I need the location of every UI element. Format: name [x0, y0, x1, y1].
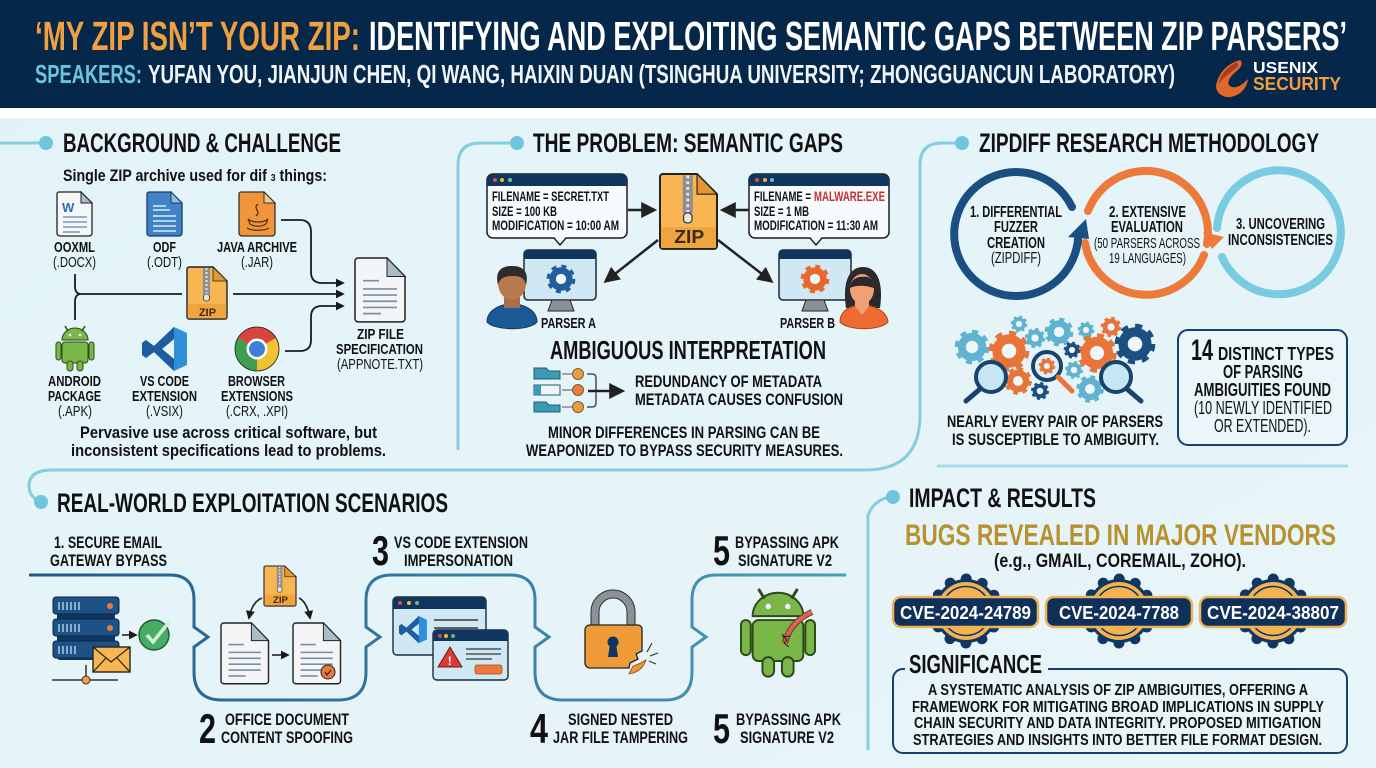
text: scenario 5 top: 5 [713, 527, 730, 574]
heading: IMPACT & RESULTS [909, 483, 1096, 513]
text: scenario 5 top: BYPASSING APK [735, 533, 840, 552]
icon: odt [147, 192, 182, 236]
callout: parser a reading: MODIFICATION = 10:00 AM [492, 218, 619, 233]
icon: content spoofing documents: ZIP [273, 595, 288, 605]
labels: bottom formats: (.VSIX) [146, 403, 183, 420]
text: scenario 2: CONTENT SPOOFING [221, 728, 353, 747]
flow line [29, 575, 846, 700]
arrows into zip and specification [75, 220, 343, 351]
intro text: Single ZIP archive used for dif 3 things: [63, 167, 327, 185]
badge: cve 24789: CVE-2024-24789 [900, 603, 1031, 623]
text: scenario 5 top [713, 527, 840, 574]
labels: top formats: OOXML [54, 239, 95, 256]
text: weaponized: WEAPONIZED TO BYPASS SECURITY MEASURES. [526, 441, 843, 460]
callout: parser b reading [749, 174, 889, 245]
panel: impact and results [886, 483, 1347, 753]
text: scenario 5 bottom [713, 705, 842, 752]
callout: parser a reading [487, 174, 627, 245]
logo: usenix security: USENIX [1253, 60, 1318, 77]
label: parser a: PARSER A [541, 315, 596, 332]
panel: zipdiff methodology [947, 128, 1347, 449]
text: scenario 3: 3 [372, 527, 389, 574]
callout: 14 distinct types: OF PARSING [1223, 362, 1303, 382]
heading: SIGNIFICANCE [909, 649, 1042, 679]
labels: bottom formats: ANDROID [48, 373, 101, 390]
heading: THE PROBLEM: SEMANTIC GAPS [533, 128, 843, 158]
icon: specification document [355, 258, 405, 322]
icon: jar [239, 192, 275, 236]
text: step 2 [1094, 204, 1200, 267]
text: step 1: 1. DIFFERENTIAL [970, 204, 1062, 221]
callout: parser b reading: MALWARE.EXE [814, 189, 885, 204]
text: step 1 [970, 204, 1062, 267]
labels: bottom formats: (.CRX, .XPI) [226, 403, 288, 420]
arrows: data flow [606, 210, 771, 281]
text: scenario 1: 1. SECURE EMAIL [54, 533, 162, 552]
text: scenario 4: SIGNED NESTED [568, 710, 673, 729]
text: vendors: (e.g., GMAIL, COREMAIL, ZOHO). [994, 551, 1246, 572]
heading: REAL-WORLD EXPLOITATION SCENARIOS [57, 488, 448, 518]
text: scenario 2: OFFICE DOCUMENT [225, 710, 349, 729]
text: scenario 5 bottom: SIGNATURE V2 [740, 728, 834, 747]
callout: parser b reading: FILENAME = [754, 189, 811, 204]
callout: parser a reading: SIZE = 100 KB [492, 204, 557, 219]
label: specification [336, 326, 423, 373]
icon: parser a monitor [524, 250, 596, 311]
icon: zip file [660, 174, 717, 249]
badge: cve 38807 [1200, 579, 1346, 643]
cycle: step 2 ring [1085, 171, 1224, 295]
icon: gears and magnifiers [958, 317, 1152, 401]
logo: usenix security [1216, 60, 1341, 97]
icon: zip file: ZIP [674, 226, 704, 247]
icon: email gateway server [52, 597, 169, 684]
speakers: SPEAKERS: [35, 59, 142, 89]
panel: real-world exploitation scenarios [29, 488, 846, 752]
body text [912, 682, 1324, 749]
labels: top formats [53, 239, 297, 271]
text: parser pair finding [947, 412, 1163, 449]
callout: parser a reading: FILENAME = SECRET.TXT [492, 189, 610, 204]
panel: significance [893, 649, 1347, 753]
label: specification: (APPNOTE.TXT) [337, 356, 423, 373]
text: step 3 [1228, 216, 1333, 249]
logo: usenix security: SECURITY [1253, 74, 1341, 94]
text: scenario 3: IMPERSONATION [404, 551, 513, 570]
text: redundancy: REDUNDANCY OF METADATA [635, 372, 822, 391]
text: step 1: (ZIPDIFF) [991, 250, 1041, 267]
heading marker dot [510, 136, 524, 150]
text: redundancy [635, 372, 843, 409]
cycle: step 3 ring [1217, 170, 1341, 294]
callout: 14 distinct types: OR EXTENDED). [1214, 416, 1311, 436]
text: scenario 5 bottom: 5 [713, 705, 730, 752]
labels: top formats: ODF [153, 239, 176, 256]
icon: person b [840, 267, 888, 329]
labels: top formats: (.ODT) [147, 254, 182, 271]
badge: cve 38807: CVE-2024-38807 [1207, 603, 1339, 623]
callout: 14 distinct types: DISTINCT TYPES [1218, 344, 1334, 364]
labels: top formats: (.JAR) [241, 254, 273, 271]
icon: docx: W [62, 200, 75, 215]
icon: docx [57, 192, 92, 236]
icon: person a [487, 266, 537, 329]
labels: top formats: JAVA ARCHIVE [217, 239, 297, 256]
heading marker dot [955, 136, 969, 150]
text: scenario 2: 2 [199, 705, 216, 752]
text: step 1: CREATION [987, 235, 1045, 252]
text: step 1: FUZZER [994, 219, 1038, 236]
text: step 2: 2. EXTENSIVE [1109, 204, 1186, 221]
labels: bottom formats: EXTENSION [132, 388, 197, 405]
text: weaponized: MINOR DIFFERENCES IN PARSING CAN BE [548, 423, 820, 442]
label: parser b: PARSER B [780, 315, 835, 332]
callout: 14 distinct types [1178, 330, 1347, 445]
icon: zip file: ZIP [199, 307, 216, 319]
labels: bottom formats: EXTENSIONS [221, 388, 293, 405]
icon: parser b monitor [779, 250, 851, 311]
closing statement [71, 424, 386, 460]
icon: metadata redundancy [534, 368, 622, 412]
text: scenario 3: VS CODE EXTENSION [394, 533, 528, 552]
labels: bottom formats: VS CODE [140, 373, 189, 390]
text: step 3: 3. UNCOVERING [1236, 216, 1325, 233]
text: parser pair finding: IS SUSCEPTIBLE TO AMBIGUITY. [952, 430, 1159, 449]
cycle: step 1 ring [954, 172, 1089, 296]
text: weaponized [526, 423, 843, 460]
labels: bottom formats: BROWSER [228, 373, 285, 390]
labels: bottom formats [48, 373, 293, 420]
heading marker dot [34, 495, 48, 509]
header band [0, 0, 1376, 118]
badge: cve 7788: CVE-2024-7788 [1059, 603, 1179, 623]
text: step 2: (50 PARSERS ACROSS [1094, 235, 1200, 252]
callout: 14 distinct types: 14 [1191, 334, 1213, 367]
callout: 14 distinct types: AMBIGUITIES FOUND [1194, 380, 1331, 400]
text: scenario 1 [50, 533, 167, 570]
text: step 2: 19 LANGUAGES) [1109, 250, 1186, 267]
badge: cve 24789 [893, 579, 1038, 643]
title: ‘MY ZIP ISN’T YOUR ZIP: [35, 13, 360, 59]
closing statement: Pervasive use across critical software, but [80, 424, 377, 442]
text: scenario 5 top: SIGNATURE V2 [738, 551, 832, 570]
label: specification: ZIP FILE [357, 326, 404, 343]
labels: bottom formats: PACKAGE [48, 388, 101, 405]
panel: background and challenge [39, 128, 423, 460]
text: scenario 4 [530, 705, 688, 752]
icon: vs code impersonation windows: ! [448, 654, 452, 668]
heading marker dot [39, 136, 53, 150]
label: specification: SPECIFICATION [336, 341, 423, 358]
icon: content spoofing documents [221, 566, 340, 684]
text: step 3: INCONSISTENCIES [1228, 232, 1333, 249]
labels: top formats: (.DOCX) [53, 254, 96, 271]
icon: android [56, 326, 94, 371]
callout: parser b reading: SIZE = 1 MB [754, 204, 809, 219]
icon: zip file [187, 267, 227, 319]
subheading: AMBIGUOUS INTERPRETATION [550, 335, 826, 365]
labels: bottom formats: (.APK) [58, 403, 92, 420]
text: step 2: EVALUATION [1111, 219, 1183, 236]
text: redundancy: METADATA CAUSES CONFUSION [635, 390, 843, 409]
text: scenario 1: GATEWAY BYPASS [50, 551, 167, 570]
closing statement: inconsistent specifications lead to problems. [71, 442, 386, 460]
icon: tampered android [741, 589, 815, 677]
icon: vs code impersonation windows [393, 597, 508, 680]
text: scenario 4: JAR FILE TAMPERING [553, 728, 688, 747]
icon: chrome [235, 327, 279, 371]
heading marker dot [886, 490, 900, 504]
icon: vs code [142, 327, 187, 371]
badge: cve 7788 [1046, 579, 1192, 643]
heading: BACKGROUND & CHALLENGE [63, 128, 341, 158]
connector lines between sections [0, 143, 1348, 750]
text: parser pair finding: NEARLY EVERY PAIR OF PARSERS [947, 412, 1163, 431]
icon: broken padlock [585, 590, 658, 674]
callout: parser b reading: MODIFICATION = 11:30 AM [754, 218, 878, 233]
text: scenario 4: 4 [530, 705, 548, 752]
panel: the problem [487, 128, 889, 460]
text: scenario 5 bottom: BYPASSING APK [736, 710, 842, 729]
text: scenario 3 [372, 527, 528, 574]
text: scenario 2 [199, 705, 353, 752]
